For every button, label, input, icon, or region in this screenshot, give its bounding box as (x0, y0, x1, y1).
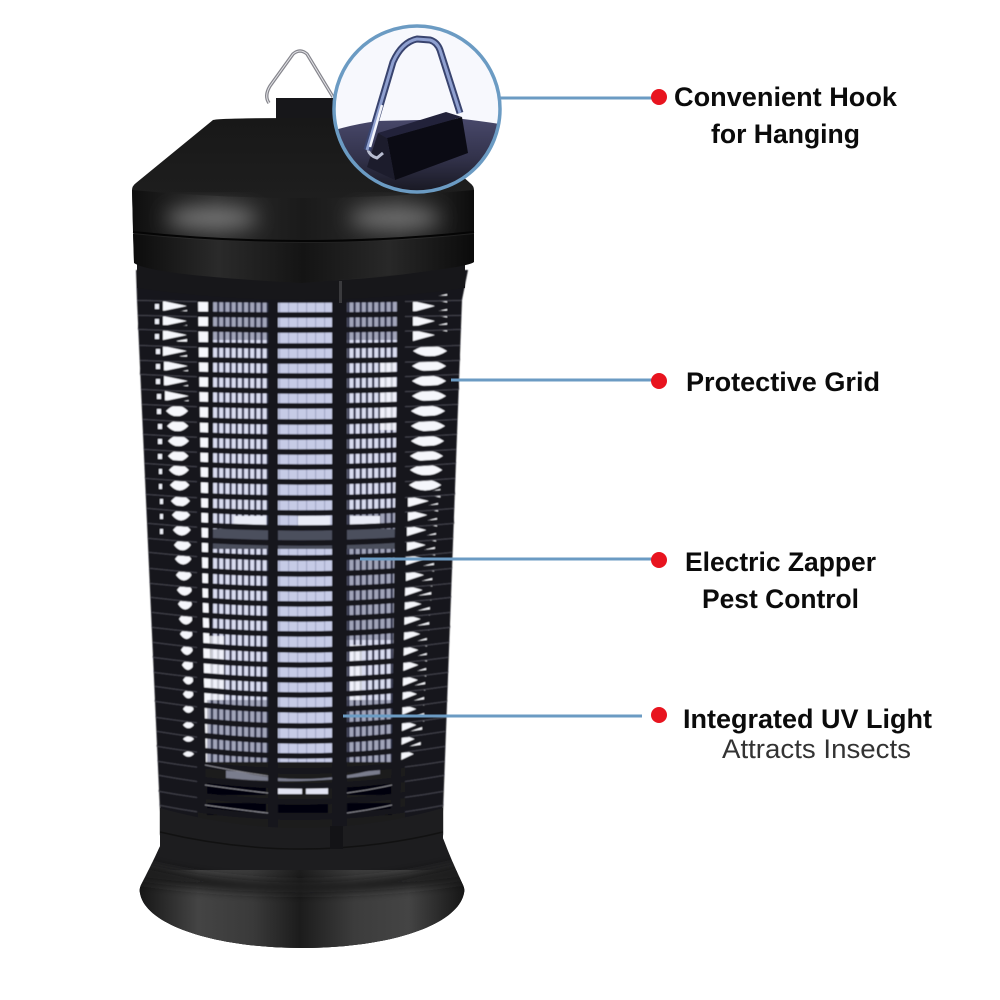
feature: protective grid: Protective Grid (686, 367, 880, 397)
grid: left edge ticks (155, 304, 163, 534)
icon: small hanging hook (267, 51, 336, 121)
rung edge sheen (137, 300, 462, 819)
grid: right outer openings (401, 294, 447, 760)
callout: hook close-up inset (334, 26, 500, 195)
tube highlights (208, 360, 396, 700)
tube collar band (213, 529, 397, 549)
grid: bright inner slots (198, 302, 213, 762)
UV light tube: centre section (278, 302, 332, 762)
feature: electric zapper (651, 547, 876, 614)
grid rungs (137, 298, 462, 817)
lid: cone, bands and collar (132, 118, 474, 303)
UV light tube: left section (207, 302, 268, 762)
feature: integrated UV light: Attracts Insects (722, 734, 911, 764)
UV light tube: right section (347, 302, 397, 762)
feature: convenient hook (651, 82, 898, 149)
connector lines (343, 98, 655, 716)
feature: electric zapper: Pest Control (702, 584, 859, 614)
grid vertical bars (187, 296, 412, 830)
tube shading (207, 302, 397, 762)
base (130, 808, 470, 950)
product: insect zapper lantern (130, 51, 474, 950)
protective grid cage (136, 270, 468, 835)
grid: left outer openings (163, 301, 194, 757)
feature: electric zapper: Electric Zapper (685, 547, 876, 577)
lower window sheen (205, 765, 392, 813)
feature: convenient hook: Convenient Hook (674, 82, 898, 112)
feature: integrated UV light (651, 704, 932, 764)
feature: integrated UV light: Integrated UV Light (683, 704, 932, 734)
lower tube base (198, 762, 405, 835)
feature: convenient hook: for Hanging (711, 119, 860, 149)
